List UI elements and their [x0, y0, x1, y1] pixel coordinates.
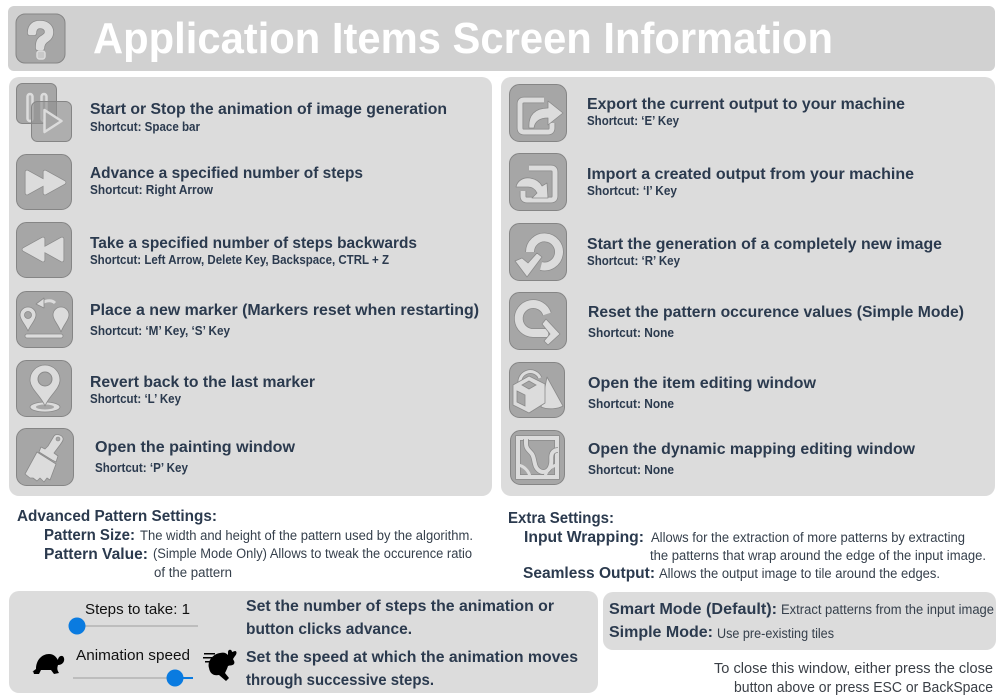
item: painting window: Shortcut: ‘P’ Key	[95, 460, 189, 475]
item: advance: Advance a specified number of steps	[90, 165, 363, 182]
icon: new image arrow	[510, 224, 566, 280]
item: reset values	[588, 304, 964, 340]
panel: left actions	[9, 77, 492, 496]
item: import	[587, 166, 914, 198]
panel: sliders	[9, 591, 598, 693]
item: step backwards: Shortcut: Left Arrow, Delete Key, Backspace, CTRL + Z	[90, 252, 389, 267]
item: start or stop: Shortcut: Space bar	[90, 119, 200, 134]
item: reset values: Reset the pattern occurence values (Simple Mode)	[588, 304, 964, 321]
item: dynamic mapping: Shortcut: None	[588, 462, 674, 477]
icon: export	[510, 84, 566, 142]
slider: animation speed	[73, 648, 193, 686]
item: revert marker: Revert back to the last marker	[90, 374, 315, 391]
slider: steps to take	[68, 602, 198, 634]
text block: close instructions	[714, 661, 993, 696]
panel: modes: Extract patterns from the input image	[781, 602, 994, 617]
item: step backwards: Take a specified number of steps backwards	[90, 235, 417, 252]
text block: close instructions: To close this window, either press the close	[714, 661, 993, 677]
text block: advanced pattern settings: Pattern Size:	[44, 527, 135, 544]
item: advance	[90, 165, 363, 197]
text: slider descriptions: button clicks advance.	[246, 621, 412, 638]
panel: right actions	[501, 77, 995, 496]
panel: modes	[603, 592, 996, 650]
item: step backwards	[90, 235, 417, 267]
text: slider descriptions: through successive steps.	[246, 672, 434, 689]
title banner	[8, 6, 995, 71]
icon: dynamic mapping	[510, 430, 564, 484]
item: import: Shortcut: ‘I’ Key	[587, 183, 678, 198]
item: advance: Shortcut: Right Arrow	[90, 182, 214, 197]
icon: rewind	[16, 222, 72, 278]
slider: animation speed: Animation speed	[76, 648, 190, 664]
text: slider descriptions	[246, 598, 578, 689]
item: new image: Start the generation of a completely new image	[587, 236, 942, 253]
icon: reset arrow	[510, 292, 566, 350]
item: painting window	[95, 439, 296, 475]
icon: shapes	[510, 362, 564, 418]
item: revert marker: Shortcut: ‘L’ Key	[90, 391, 182, 406]
item: export	[587, 96, 905, 128]
item: import: Import a created output from your machine	[587, 166, 914, 183]
text block: extra settings: Extra Settings:	[508, 510, 614, 527]
item: reset values: Shortcut: None	[588, 325, 674, 340]
slider: steps to take: Steps to take: 1	[85, 602, 190, 618]
text block: advanced pattern settings: Advanced Pattern Settings:	[17, 508, 217, 525]
item: item editing: Shortcut: None	[588, 396, 674, 411]
text block: extra settings	[508, 510, 986, 582]
text block: extra settings: Allows the output image to tile around the edges.	[659, 566, 940, 581]
item: new marker	[90, 302, 479, 338]
icon: question mark	[16, 14, 65, 63]
text block: extra settings: Seamless Output:	[523, 565, 655, 582]
item: start or stop: Start or Stop the animation of image generation	[90, 101, 447, 118]
item: revert marker	[90, 374, 315, 406]
text block: advanced pattern settings: of the pattern	[154, 565, 232, 580]
item: new marker: Shortcut: ‘M’ Key, ‘S’ Key	[90, 323, 231, 338]
icon: fast forward	[16, 154, 72, 210]
icon: place marker	[16, 292, 72, 348]
item: dynamic mapping: Open the dynamic mapping editing window	[588, 441, 916, 458]
icon: paintbrush	[16, 428, 74, 486]
icon: play pause	[16, 84, 72, 142]
item: export: Shortcut: ‘E’ Key	[587, 113, 680, 128]
panel: modes: Simple Mode:	[609, 624, 713, 641]
icon: map pin	[16, 360, 72, 416]
text: slider descriptions: Set the number of steps the animation or	[246, 598, 554, 615]
item: export: Export the current output to your machine	[587, 96, 905, 113]
item: new marker: Place a new marker (Markers reset when restarting)	[90, 302, 479, 319]
title: Application Items Screen Information	[93, 14, 833, 63]
item: new image: Shortcut: ‘R’ Key	[587, 253, 681, 268]
text block: extra settings: Allows for the extraction of more patterns by extracting	[651, 530, 965, 545]
item: item editing: Open the item editing window	[588, 375, 817, 392]
text: slider descriptions: Set the speed at which the animation moves	[246, 649, 578, 666]
text block: extra settings: Input Wrapping:	[524, 529, 644, 546]
panel: modes: Smart Mode (Default):	[609, 601, 777, 618]
icon: import	[510, 154, 566, 210]
icon: rabbit	[203, 650, 236, 681]
item: painting window: Open the painting window	[95, 439, 296, 456]
panel: modes: Use pre-existing tiles	[717, 626, 834, 641]
text block: close instructions: button above or press ESC or BackSpace	[734, 680, 993, 696]
item: new image	[587, 236, 942, 268]
item: item editing	[588, 375, 817, 411]
text block: advanced pattern settings: The width and height of the pattern used by the algorithm.	[140, 528, 473, 543]
item: dynamic mapping	[588, 441, 916, 477]
text block: extra settings: the patterns that wrap around the edge of the input image.	[650, 548, 986, 563]
text block: advanced pattern settings: Pattern Value:	[44, 546, 148, 563]
text block: advanced pattern settings: (Simple Mode Only) Allows to tweak the occurence ratio	[153, 546, 472, 561]
text block: advanced pattern settings	[17, 508, 473, 580]
icon: turtle	[32, 654, 64, 674]
item: start or stop	[90, 101, 447, 134]
